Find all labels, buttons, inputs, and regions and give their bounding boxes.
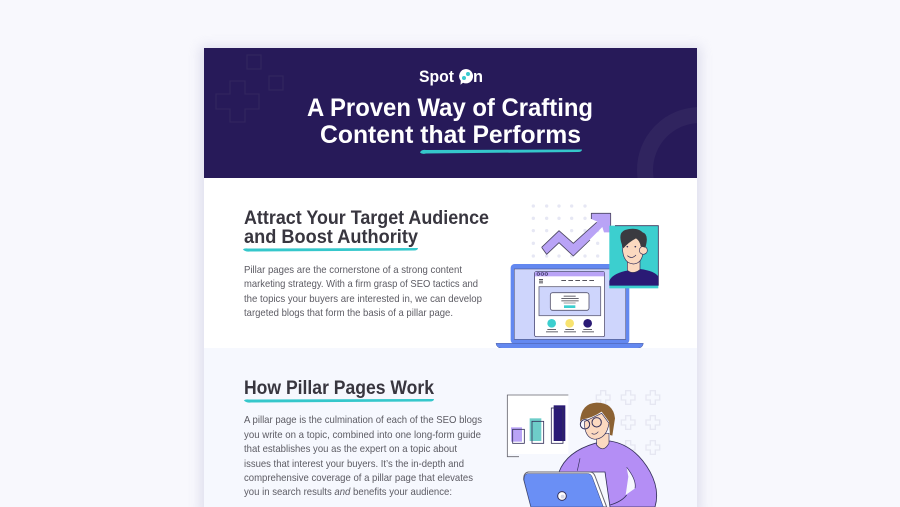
title: Content that Performs <box>320 121 581 149</box>
illustration: laptop with growth arrow and portrait <box>496 204 658 348</box>
panel: header <box>204 48 697 178</box>
icon: laptop <box>496 264 643 348</box>
text block: attract: targeted blogs that form the basis of a pillar page. <box>244 307 453 319</box>
text block: how pillar pages work: you write on a topic, combined into one long-form guide <box>244 429 481 441</box>
panel: how pillar pages work <box>204 348 697 507</box>
text block: attract: the topics your buyers are interested in, we can develop <box>244 293 482 305</box>
logo: n <box>473 67 483 86</box>
heading: attract: Attract Your Target Audience <box>244 208 489 229</box>
heading: attract <box>243 208 489 252</box>
logo <box>419 67 483 86</box>
text block: how pillar pages work: issues that interest your buyers. It’s the in-depth and <box>244 458 464 470</box>
text block: how pillar pages work <box>244 414 482 498</box>
icon: laptop <box>524 472 607 507</box>
text block: how pillar pages work: A pillar page is the culmination of each of the SEO blogs <box>244 414 482 426</box>
illustration: person with chart and laptop <box>507 391 660 507</box>
title: A Proven Way of Crafting <box>307 94 593 122</box>
text block: how pillar pages work: that establishes you as the expert on a topic about <box>244 443 457 455</box>
text block: attract: Pillar pages are the cornerstone of a strong content <box>244 264 462 276</box>
heading: attract: and Boost Authority <box>244 227 418 248</box>
heading: how pillar pages work: How Pillar Pages Work <box>244 378 434 399</box>
icon: portrait <box>609 226 658 288</box>
icon: person <box>559 403 657 507</box>
text block: attract: marketing strategy. With a firm grasp of SEO tactics and <box>244 278 478 290</box>
logo: Spot <box>419 67 454 86</box>
text block: how pillar pages work: comprehensive coverage of a pillar page that elevates <box>244 472 473 484</box>
text block: how pillar pages work: you in search results and benefits your audience: <box>244 486 452 498</box>
icon: growth arrow <box>542 213 611 256</box>
chart: bars <box>507 395 568 457</box>
title <box>307 94 593 154</box>
text block: attract <box>244 264 482 319</box>
panel: attract section <box>204 178 697 348</box>
